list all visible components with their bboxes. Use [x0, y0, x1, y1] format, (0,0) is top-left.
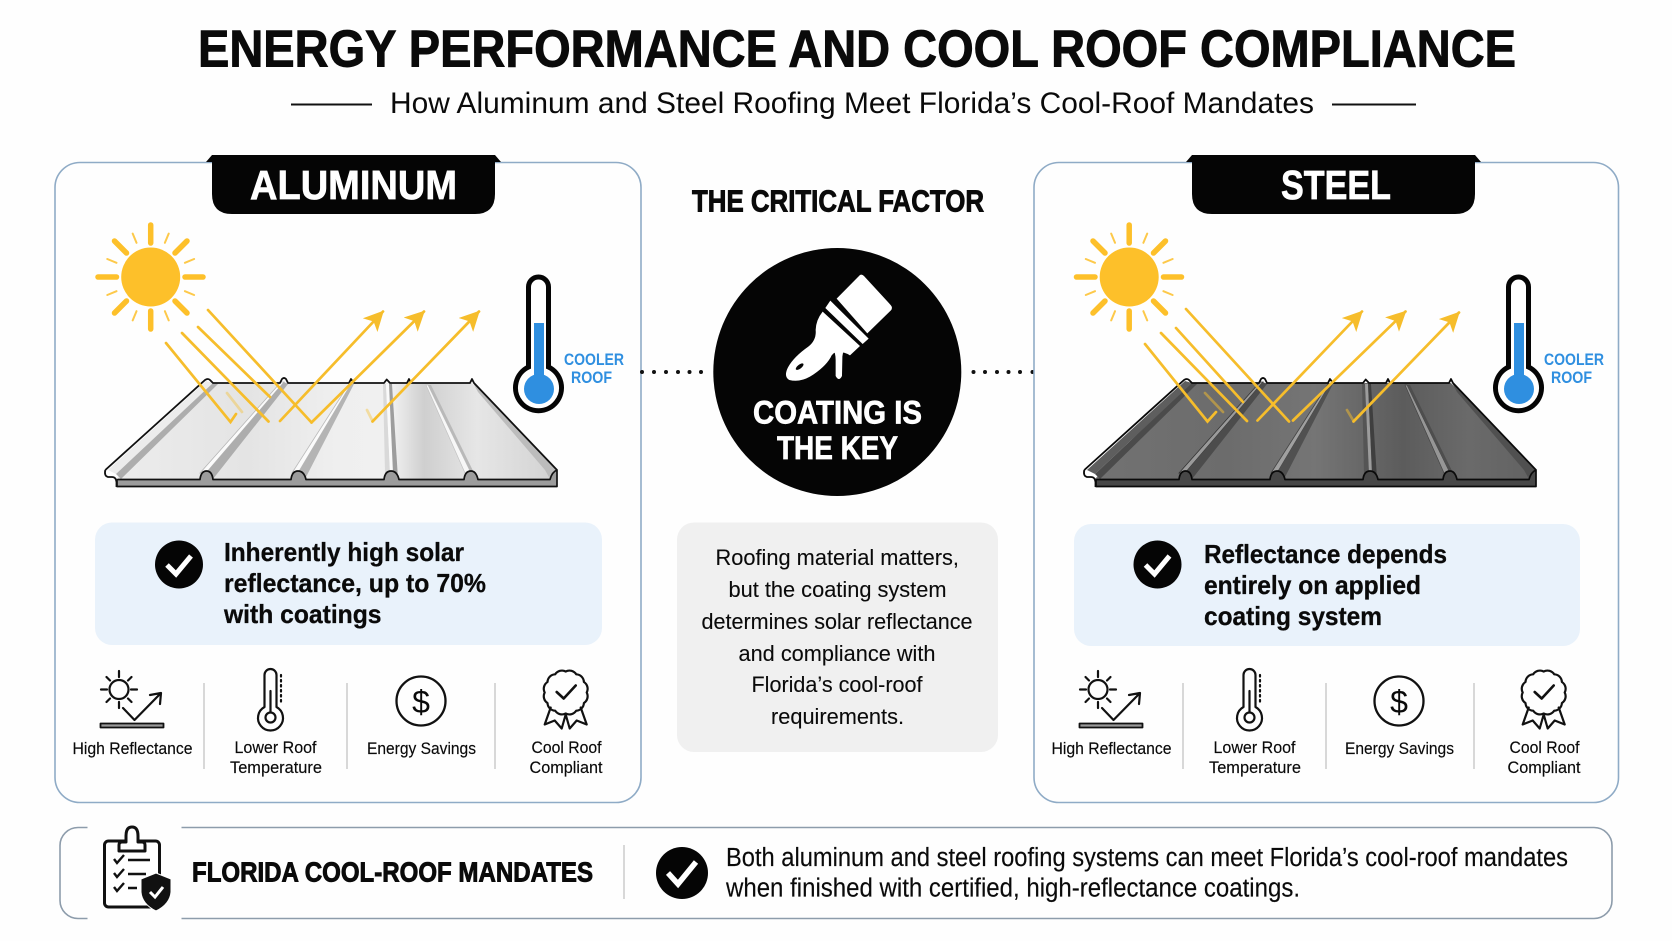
feature: energy savings: $ [1390, 684, 1408, 720]
arrows: reflected sunlight [166, 310, 479, 422]
illustration: steel roof [1084, 378, 1536, 487]
feature: high reflectance [72, 671, 192, 758]
badge: coating is the key [713, 248, 961, 496]
feature: cool roof compliant [1508, 671, 1581, 777]
feature: cool roof compliant: Cool Roof [1510, 739, 1580, 757]
label: cooler roof: COOLER [1544, 351, 1604, 369]
dotted connectors [640, 370, 1034, 374]
text: mandates summary [725, 844, 1568, 903]
icon: clipboard with shield [104, 827, 171, 911]
subtitle: How Aluminum and Steel Roofing Meet Florida’s Cool-Roof Mandates [390, 87, 1314, 120]
tab: aluminum heading [206, 155, 501, 214]
icon: paint brush [786, 275, 892, 381]
callout: aluminum reflectance: Inherently high solar [224, 537, 464, 567]
feature: high reflectance: High Reflectance [72, 740, 192, 758]
title: ENERGY PERFORMANCE AND COOL ROOF COMPLIANCE [198, 20, 1516, 78]
icon: check [1134, 540, 1182, 588]
icon: thermometer [1496, 277, 1542, 411]
tab: aluminum heading: ALUMINUM [250, 162, 457, 208]
feature: cool roof compliant: Compliant [530, 759, 603, 777]
callout: steel reflectance: Reflectance depends [1204, 539, 1447, 569]
panel: center explanation [677, 522, 998, 752]
panel: steel [1034, 155, 1618, 802]
feature: lower roof temperature: Lower Roof [234, 739, 317, 757]
panel: center explanation: and compliance with [738, 641, 936, 666]
badge: coating is the key: COATING IS [753, 394, 922, 430]
illustration: aluminum roof [105, 378, 557, 487]
panel: center explanation: but the coating system [728, 577, 946, 602]
arrows: reflected sunlight [1145, 309, 1459, 422]
feature: energy savings [1345, 676, 1454, 758]
label: cooler roof: ROOF [571, 369, 612, 387]
panel: center explanation: Florida’s cool-roof [752, 672, 923, 697]
feature: lower roof temperature [230, 669, 322, 777]
feature: energy savings: Energy Savings [367, 740, 476, 758]
icon: sun [98, 225, 203, 329]
panel: center explanation: Roofing material matters, [716, 545, 959, 570]
tab: steel heading [1186, 155, 1481, 214]
callout: aluminum reflectance: with coatings [223, 599, 382, 629]
feature: energy savings: $ [412, 684, 430, 720]
feature: cool roof compliant: Compliant [1508, 759, 1581, 777]
panel: center explanation: requirements. [771, 704, 904, 729]
text: mandates summary: when finished with certified, high-reflectance coatings. [725, 875, 1300, 903]
feature: lower roof temperature: Temperature [1209, 759, 1301, 777]
callout: steel reflectance [1074, 524, 1580, 646]
callout: aluminum reflectance [95, 522, 602, 645]
feature: high reflectance: High Reflectance [1052, 740, 1172, 758]
feature: lower roof temperature: Temperature [230, 759, 322, 777]
callout: steel reflectance: coating system [1204, 601, 1382, 631]
panel: center explanation: determines solar reflectance [702, 609, 972, 634]
panel: florida mandates [60, 822, 1612, 924]
icon: sun [1076, 225, 1182, 329]
label: cooler roof [1544, 351, 1604, 387]
label: cooler roof [564, 351, 624, 387]
callout: steel reflectance: entirely on applied [1204, 570, 1421, 600]
feature: energy savings: Energy Savings [1345, 740, 1454, 758]
feature: high reflectance [1052, 671, 1172, 758]
text: mandates summary: Both aluminum and steel roofing systems can meet Florida’s cool-roof mandates [726, 844, 1568, 872]
icon: thermometer [516, 277, 562, 411]
heading: florida cool-roof mandates: FLORIDA COOL-ROOF MANDATES [192, 856, 593, 888]
tab: steel heading: STEEL [1281, 162, 1391, 208]
center heading: THE CRITICAL FACTOR [692, 184, 984, 218]
label: cooler roof: ROOF [1551, 369, 1592, 387]
label: cooler roof: COOLER [564, 351, 624, 369]
callout: aluminum reflectance: reflectance, up to 70% [224, 568, 486, 598]
feature: lower roof temperature [1209, 669, 1301, 777]
icon: check [155, 540, 203, 588]
feature: cool roof compliant [530, 671, 603, 777]
panel: aluminum [55, 155, 641, 802]
feature: lower roof temperature: Lower Roof [1214, 739, 1296, 757]
icon: check [656, 847, 708, 899]
feature: cool roof compliant: Cool Roof [532, 739, 602, 757]
badge: coating is the key: THE KEY [777, 430, 898, 466]
feature: energy savings [367, 676, 476, 758]
